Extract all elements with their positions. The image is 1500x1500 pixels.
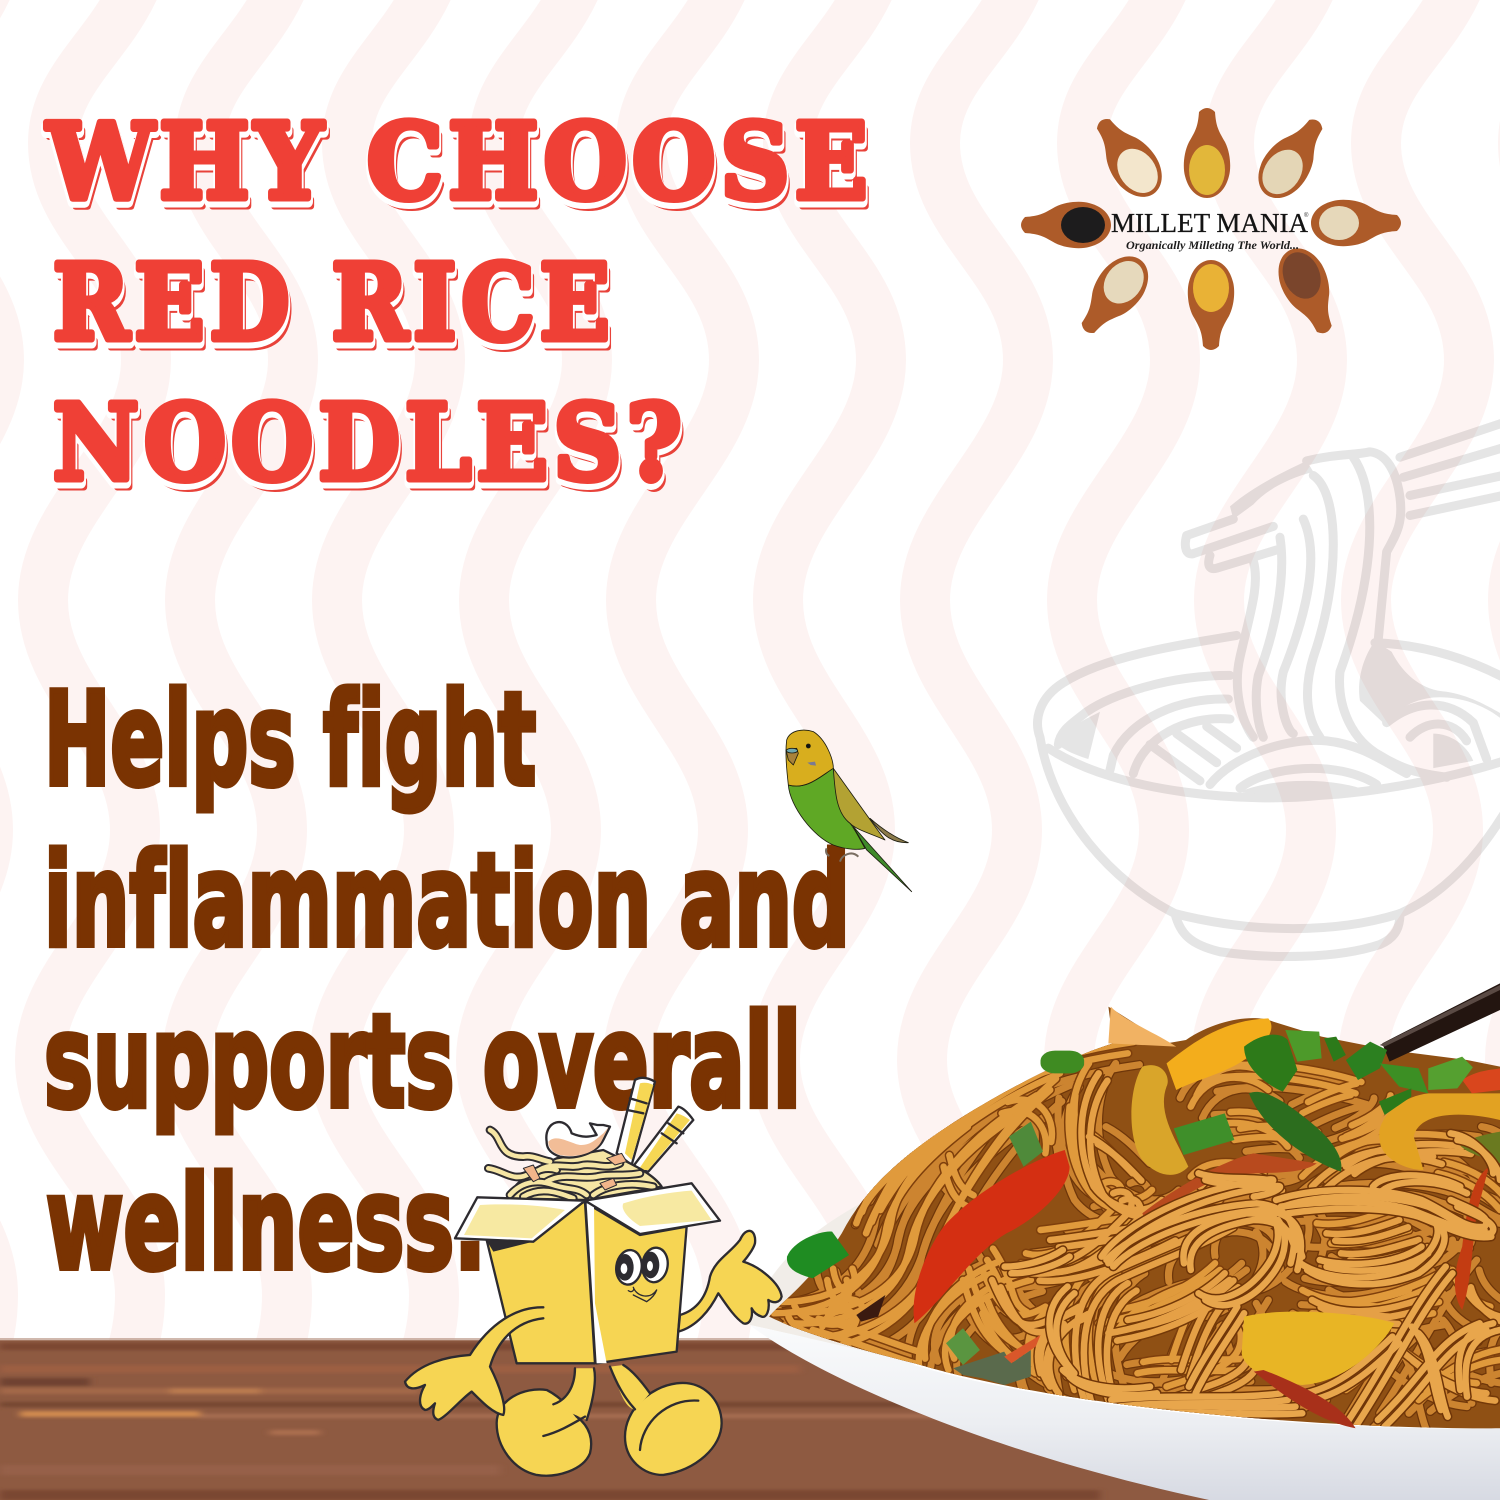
logo: Millet Mania <box>1021 107 1401 350</box>
title: Why choose red rice noodles? <box>46 100 876 512</box>
box flaps <box>455 1183 720 1252</box>
right leg and foot <box>610 1365 722 1475</box>
noodles: middle layer <box>992 1073 1500 1407</box>
title: Why choose red rice noodles?: RED RICE <box>53 241 615 364</box>
title: Why choose red rice noodles?: WHY CHOOSE <box>46 100 873 223</box>
left leg and foot <box>497 1368 595 1476</box>
noodles: back layer <box>774 1042 1500 1400</box>
title: Why choose red rice noodles?: NOODLES? <box>56 389 690 512</box>
body text: health benefit: Helps fight <box>44 666 536 815</box>
white plate <box>750 1193 1500 1500</box>
logo tagline: Organically Milleting The World... <box>1126 240 1299 252</box>
noodles and shrimp <box>488 1122 662 1200</box>
body text: health benefit: wellness. <box>46 1150 486 1299</box>
photo: plate of noodles <box>750 983 1500 1500</box>
spoon: top <box>1184 108 1230 198</box>
red pepper <box>914 1150 1070 1323</box>
body text: health benefit <box>44 666 850 1299</box>
title: Why choose red rice noodles?: WHY CHOOSE <box>49 108 876 231</box>
yellow pepper and carrot, foreground <box>1242 1312 1394 1428</box>
box left face <box>487 1202 595 1363</box>
box centre highlight <box>587 1203 607 1363</box>
spoon: bottom <box>1188 260 1234 350</box>
title: Why choose red rice noodles?: NOODLES? <box>53 381 687 504</box>
noodle mound <box>769 1007 1500 1428</box>
chopsticks <box>617 1078 693 1172</box>
character: walking noodle box mascot <box>405 1078 782 1476</box>
right hand <box>678 1231 782 1332</box>
title: Why choose red rice noodles?: WHY CHOOSE <box>46 104 873 227</box>
spoon: bottom right <box>1269 241 1347 342</box>
vegetables: back layer <box>1009 983 1500 1175</box>
face <box>614 1246 670 1302</box>
title: Why choose red rice noodles?: RED RICE <box>53 245 615 368</box>
title: Why choose red rice noodles?: NOODLES? <box>53 385 687 508</box>
spoon: left <box>1021 202 1111 248</box>
spoon: bottom left <box>1067 246 1159 345</box>
body text: health benefit: inflammation and <box>44 827 850 976</box>
body text: health benefit: supports overall <box>44 988 801 1137</box>
icon: faint noodle bowl outline <box>1038 417 1500 957</box>
noodles: deep layer <box>763 1045 1500 1438</box>
bird: budgerigar on the letter d <box>786 730 912 892</box>
spoon: top left <box>1082 107 1173 207</box>
noodles: top layer <box>1005 1133 1500 1427</box>
title: Why choose red rice noodles?: RED RICE <box>56 249 618 372</box>
spoon: top right <box>1247 108 1337 208</box>
spoon: right <box>1311 200 1401 246</box>
box right face <box>587 1203 687 1363</box>
left arm and hand <box>405 1307 543 1420</box>
logo wordmark: MILLET MANIA <box>1111 208 1308 238</box>
registered mark: ® <box>1304 212 1309 219</box>
wooden table <box>0 1338 1500 1500</box>
vegetables: front layer <box>787 1030 1500 1385</box>
